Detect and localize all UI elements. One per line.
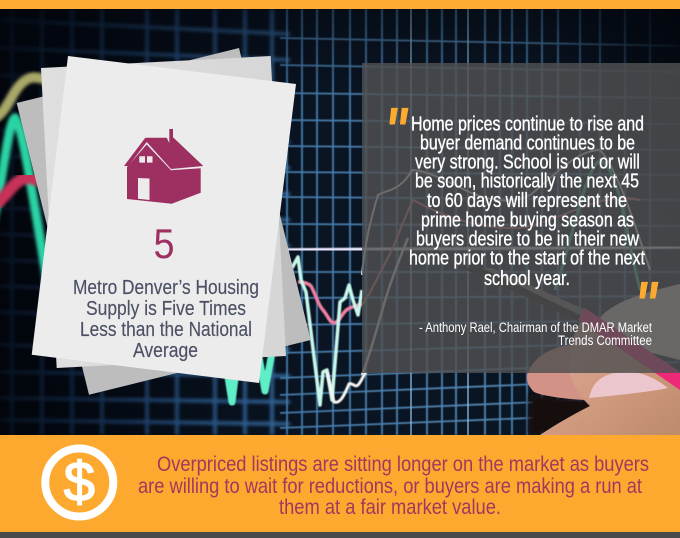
- icon: dollar coin: $: [64, 450, 95, 513]
- screen grid, sharp right part: [280, 9, 680, 435]
- quote text: school year.: [484, 268, 570, 290]
- pink curve: [298, 282, 362, 323]
- banner text: them at a fair market value.: [279, 496, 501, 519]
- shadow below fingers: [528, 394, 600, 435]
- background chart photo: [0, 9, 680, 435]
- upper finger: [600, 284, 680, 360]
- icon: house: [124, 129, 203, 204]
- quote text: to 60 days will represent the: [427, 190, 627, 212]
- teal and white curve: [292, 257, 362, 405]
- green curve: [0, 118, 80, 360]
- quote text: [409, 114, 645, 290]
- banner text: [138, 453, 649, 519]
- red curve: [0, 178, 50, 205]
- pen: [462, 268, 680, 390]
- yellow curve: [0, 75, 60, 118]
- thumb: [540, 318, 680, 435]
- closing quote mark: ": [634, 268, 659, 343]
- blue horizontal signal line: [0, 244, 60, 260]
- quote text: prime home buying season as: [421, 210, 634, 232]
- stat caption: [73, 277, 259, 362]
- thumb nail: [589, 372, 668, 398]
- bright grid lines: [411, 9, 468, 435]
- hand: [527, 284, 680, 435]
- screen grid, blurred left part: [0, 9, 290, 435]
- top orange bar: [0, 0, 680, 9]
- white curve: [327, 372, 366, 402]
- attribution: Trends Committee: [558, 333, 652, 348]
- bottom orange banner: [0, 435, 680, 538]
- stat caption: Supply is Five Times: [86, 298, 246, 320]
- index finger: [527, 345, 592, 400]
- icon: dollar coin: [45, 448, 113, 516]
- stat caption: Metro Denver’s Housing: [73, 277, 259, 299]
- quote panel: [362, 63, 680, 373]
- stat number: 5: [154, 220, 174, 267]
- stat caption: Less than the National: [80, 319, 252, 341]
- attribution: [419, 320, 652, 348]
- opening quote mark: ": [384, 94, 409, 169]
- stat caption: Average: [133, 340, 198, 362]
- stacked paper card: [17, 48, 311, 395]
- grey curves behind panel: [362, 238, 408, 375]
